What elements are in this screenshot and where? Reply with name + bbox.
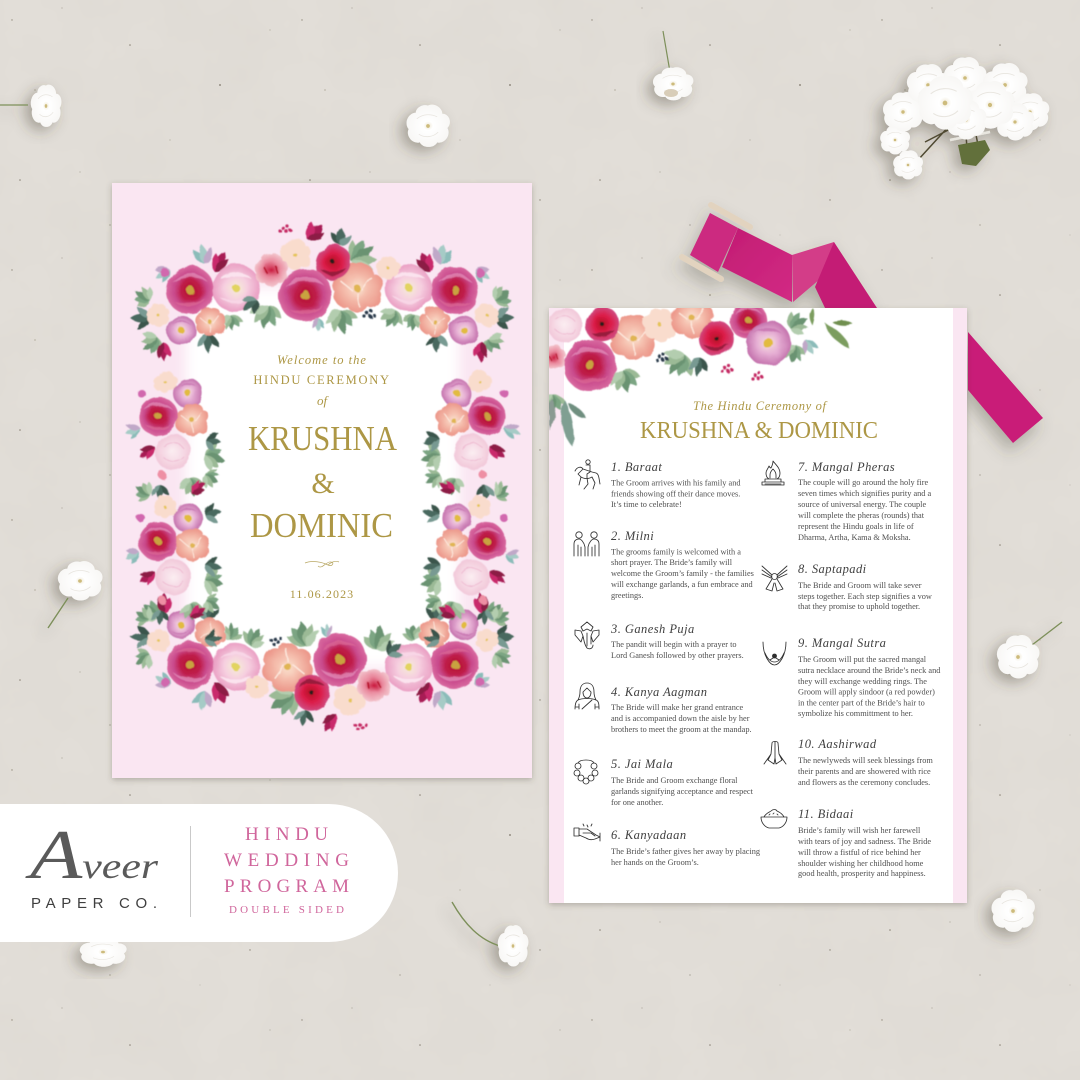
icon: mangal sutra necklace — [763, 642, 786, 665]
product title: HINDU — [245, 824, 328, 845]
panel: right card back — [538, 297, 967, 903]
step 7: Mangal Pheras: represent the Hindu goals in life of — [798, 522, 914, 531]
step 9: Mangal Sutra: 9. Mangal Sutra — [798, 636, 886, 650]
step 3: Ganesh Puja: Lord Ganesh followed by other prayers. — [611, 651, 744, 660]
icon: holy fire — [762, 461, 784, 485]
step 5: Jai Mala: 5. Jai Mala — [611, 757, 673, 771]
step 10: Aashirwad: The newlyweds will seek blessings from — [798, 756, 933, 765]
step 5: Jai Mala: for one another. — [611, 798, 663, 807]
step 9: Mangal Sutra: symbolize his committment to her. — [798, 709, 913, 718]
step 1: Baraat: The Groom arrives with his family and — [611, 478, 741, 488]
step 5: Jai Mala: garlands signifying acceptance and respect — [611, 787, 754, 796]
step 4: Kanya Aagman — [575, 683, 752, 734]
step 1: Baraat — [575, 460, 741, 509]
step 11: Bidaai — [761, 807, 931, 878]
welcome text — [253, 353, 391, 408]
step 2: Milni: 2. Milni — [611, 529, 654, 543]
step 7: Mangal Pheras: Dharma, Artha, Kama & Moksha. — [798, 533, 911, 542]
step 6: Kanyadaan: The Bride’s father gives her away by placing — [611, 847, 760, 856]
step 3: Ganesh Puja: The pandit will begin with a prayer to — [611, 640, 737, 649]
step 11: Bidaai: Bride’s family will wish her farewell — [798, 826, 921, 835]
icon: floral garland — [574, 760, 598, 784]
scattered white flower: top centre — [407, 105, 450, 147]
step 5: Jai Mala: The Bride and Groom exchange floral — [611, 776, 738, 785]
icon: bowl of rice — [761, 810, 787, 828]
icon: tied knot — [762, 566, 787, 591]
floral corner — [549, 308, 853, 447]
step 3: Ganesh Puja — [575, 622, 744, 660]
icon: Ganesh — [575, 622, 599, 649]
scattered white flower: top left — [0, 85, 61, 127]
icon: joined hands — [574, 824, 600, 841]
step 10: Aashirwad: 10. Aashirwad — [798, 737, 877, 751]
step 9: Mangal Sutra — [763, 636, 941, 718]
card heading: The Hindu Ceremony of — [693, 399, 828, 413]
pink side strips — [549, 308, 967, 903]
welcome text: Welcome to the — [277, 353, 367, 367]
panel: left card front — [112, 183, 532, 778]
step 9: Mangal Sutra: The Groom will put the sacred mangal — [798, 655, 927, 664]
step 6: Kanyadaan — [574, 824, 760, 867]
step 11: Bidaai: will throw a fistful of rice behind her — [798, 848, 921, 857]
step 1: Baraat: friends showing off their dance moves. — [611, 490, 740, 498]
step 5: Jai Mala — [574, 757, 754, 807]
step 2: Milni: will exchange garlands, a fun embrace and — [611, 580, 754, 589]
step 8: Saptapadi: The Bride and Groom will take sever — [798, 581, 922, 590]
couple names: DOMINIC — [250, 506, 393, 545]
product title: PROGRAM — [224, 876, 349, 897]
scattered white flower with stem: right — [997, 622, 1062, 679]
step 8: Saptapadi: that they promise to uphold together. — [798, 602, 920, 611]
step 9: Mangal Sutra: in the center part of the Bride’s hair to — [798, 698, 925, 708]
step 6: Kanyadaan: 6. Kanyadaan — [611, 828, 687, 842]
product title — [224, 824, 349, 916]
step 10: Aashirwad — [764, 737, 933, 787]
couple names: & — [311, 467, 335, 500]
icon: praying hands — [764, 742, 786, 764]
step 8: Saptapadi: steps together. Each step signifies a vow — [798, 592, 932, 601]
scattered white flower with stem: left — [48, 561, 103, 628]
card heading — [640, 399, 878, 444]
step 9: Mangal Sutra: they will exchange wedding rings. The — [798, 677, 927, 686]
step 3: Ganesh Puja: 3. Ganesh Puja — [610, 622, 695, 636]
step 2: Milni — [574, 529, 754, 600]
step 11: Bidaai: good health, prosperity and happiness. — [798, 869, 926, 878]
scattered white flower: bottom left — [80, 937, 127, 967]
step 2: Milni: welcome the Groom’s family - the families — [611, 569, 754, 578]
flourish — [305, 561, 339, 567]
step 1: Baraat: 1. Baraat — [611, 460, 662, 474]
wedding date: 11.06.2023 — [290, 587, 354, 601]
icon: two people greeting — [574, 532, 599, 556]
step 11: Bidaai: with tears of joy and sadness. The Bride — [798, 837, 931, 846]
icon: horse and rider — [575, 460, 600, 489]
step 7: Mangal Pheras: will complete the pheras (rounds) that — [798, 511, 925, 520]
step 7: Mangal Pheras: seven times which signifies purity and a — [798, 489, 932, 498]
step 7: Mangal Pheras: 7. Mangal Pheras — [798, 460, 895, 474]
floral wreath frame — [122, 218, 523, 737]
white centre panel — [186, 288, 459, 667]
divider — [190, 826, 191, 917]
welcome text: HINDU CEREMONY — [253, 373, 391, 387]
step 7: Mangal Pheras: source of universal energy. The couple — [798, 500, 926, 509]
step 2: Milni: greetings. — [611, 591, 644, 600]
icon: bride — [575, 683, 599, 709]
step 1: Baraat: It’s time to celebrate! — [611, 500, 682, 509]
product title: WEDDING — [224, 850, 349, 871]
step 4: Kanya Aagman: The Bride will make her grand entrance — [611, 703, 744, 712]
step 6: Kanyadaan: her hands on the Groom’s. — [611, 858, 699, 867]
scattered white flower with stem: bottom centre — [452, 902, 528, 966]
step 2: Milni: The grooms family is welcomed with a — [611, 548, 741, 556]
couple names — [248, 419, 398, 545]
white flower bouquet — [880, 57, 1049, 179]
logo subtext: PAPER CO. — [31, 895, 157, 912]
logo script: Aveer: A veer — [25, 817, 159, 894]
step 9: Mangal Sutra: Groom will apply sindoor (a red powder) — [798, 688, 935, 696]
couple names: KRUSHNA — [248, 419, 398, 458]
step 7: Mangal Pheras — [762, 460, 932, 542]
step 7: Mangal Pheras: The couple will go around the holy fire — [798, 478, 928, 487]
scattered white flower: bottom right — [992, 890, 1035, 932]
step 10: Aashirwad: and flowers as the ceremony concludes. — [798, 778, 930, 787]
step 2: Milni: short prayer. The Bride’s family will — [611, 558, 733, 567]
step 10: Aashirwad: their parents and are showered with rice — [798, 767, 931, 776]
step 4: Kanya Aagman: 4. Kanya Aagman — [611, 685, 707, 699]
card heading: KRUSHNA & DOMINIC — [640, 418, 878, 444]
welcome text: of — [317, 393, 329, 408]
step 4: Kanya Aagman: and is accompanied down the aisle by her — [611, 714, 750, 723]
step 11: Bidaai: 11. Bidaai — [798, 807, 854, 821]
step 9: Mangal Sutra: sutra necklace around the Bride’s neck and — [798, 666, 941, 675]
panel: brand banner — [0, 804, 398, 942]
product title: DOUBLE SIDED — [229, 904, 344, 916]
scattered white flower with stem: top — [653, 31, 693, 100]
step 8: Saptapadi — [762, 562, 932, 611]
step 11: Bidaai: shoulder wishing her childhood home — [798, 859, 924, 868]
step 8: Saptapadi: 8. Saptapadi — [798, 562, 867, 576]
step 4: Kanya Aagman: brothers to meet the groom at the mandap. — [611, 725, 752, 734]
ribbon spool and pink ribbon — [682, 205, 1043, 443]
